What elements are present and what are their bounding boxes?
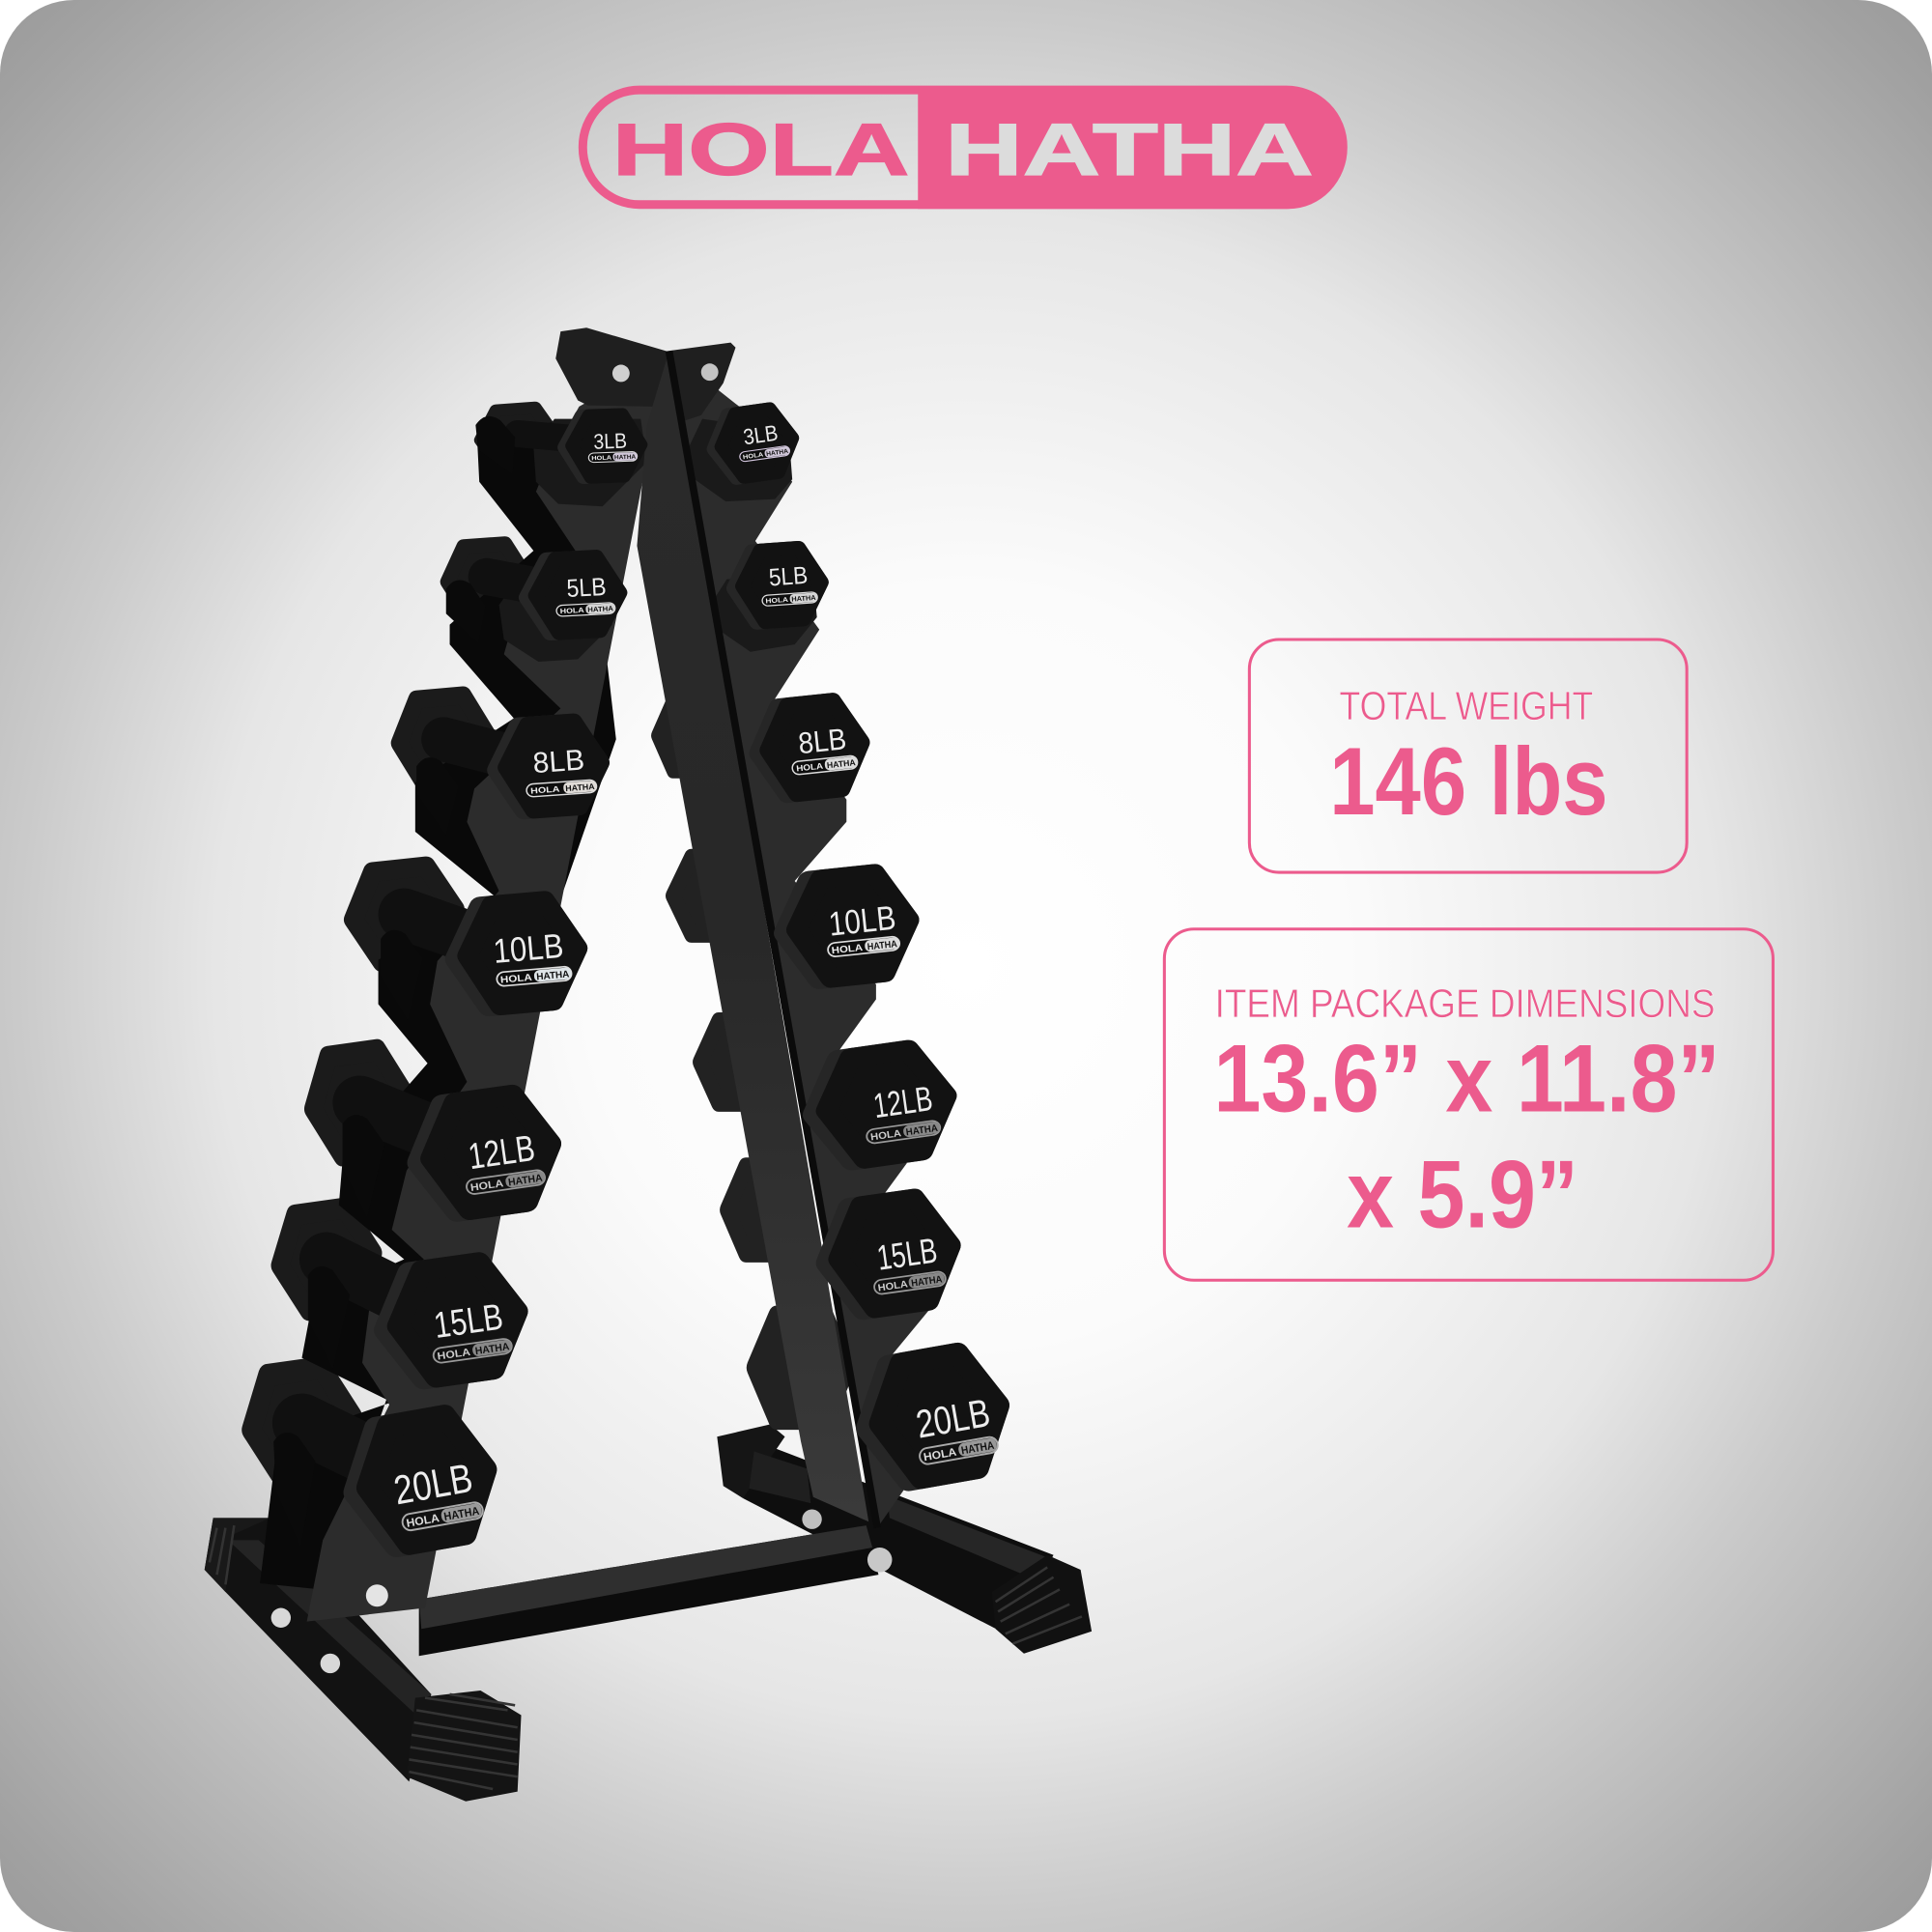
logo: HOLA xyxy=(612,109,909,191)
dumbbell 8LB left: HOLA xyxy=(530,784,560,796)
dumbbell 5LB right xyxy=(732,547,824,624)
center bar xyxy=(637,352,877,1528)
rack base: cross bar xyxy=(419,1525,878,1656)
dumbbell 12LB left: 12LB xyxy=(466,1127,537,1178)
left arm cradles xyxy=(499,419,647,662)
dumbbell 20LB right: HOLA xyxy=(923,1447,957,1463)
dumbbell 12LB left: HATHA xyxy=(507,1173,543,1188)
dumbbell 20LB right: 20LB xyxy=(913,1390,993,1447)
dumbbell 10LB left: 10LB xyxy=(492,926,565,971)
dumbbell 12LB right: HATHA xyxy=(905,1122,939,1138)
dumbbell 12LB left: HOLA xyxy=(469,1179,504,1194)
dumbbell 20LB right xyxy=(859,1349,1009,1486)
dumbbell 3LB left xyxy=(563,413,642,478)
dumbbell 20LB left xyxy=(346,1410,497,1551)
dumbbell 12LB right: HOLA xyxy=(869,1128,902,1143)
dumbbell 10LB left: HATHA xyxy=(536,970,570,982)
dumbbell 8LB left: HATHA xyxy=(565,781,596,793)
panel: item package dimensions: 13.6” x 11.8” xyxy=(1213,1026,1720,1133)
dumbbell 10LB right xyxy=(781,870,914,982)
dumbbell 20LB right: HATHA xyxy=(960,1440,995,1458)
dumbbell 3LB right: 3LB xyxy=(742,421,780,450)
dumbbell 12LB right xyxy=(808,1045,952,1165)
dumbbell 3LB left: 3LB xyxy=(593,428,627,454)
dumbbell 5LB left: 5LB xyxy=(566,572,607,603)
dumbbell 10LB left xyxy=(452,898,582,1009)
dumbbell 15LB right: 15LB xyxy=(874,1230,940,1277)
dumbbell 15LB left xyxy=(379,1259,525,1383)
dumbbell 15LB left: HATHA xyxy=(474,1342,510,1357)
dumbbell 15LB left: HOLA xyxy=(437,1347,471,1362)
panel: total weight: TOTAL WEIGHT xyxy=(1339,683,1593,728)
dumbbell 3LB right xyxy=(709,406,797,481)
dumbbell 8LB right xyxy=(754,698,866,797)
rack base: left foot xyxy=(205,1518,522,1802)
panel: total weight xyxy=(1249,639,1687,872)
dumbbell 10LB right: HOLA xyxy=(831,943,864,956)
dumbbell 8LB right: HATHA xyxy=(826,757,857,770)
dumbbell 8LB right: HOLA xyxy=(796,761,824,774)
left arm rear panel xyxy=(260,419,616,1589)
dumbbell 8LB left: 8LB xyxy=(532,743,585,780)
icon: base bolts xyxy=(271,1509,892,1673)
dumbbell 3LB left: HATHA xyxy=(614,454,637,461)
dumbbell 15LB right: HOLA xyxy=(877,1279,909,1294)
dumbbell 5LB right: 5LB xyxy=(768,560,809,591)
left arm rear dumbbell heads xyxy=(244,407,556,1482)
dumbbell 20LB left: HATHA xyxy=(443,1505,481,1523)
rack base hole xyxy=(366,1584,388,1606)
dumbbell 10LB right: 10LB xyxy=(827,898,897,943)
top bracket xyxy=(555,327,735,425)
dumbbell 12LB right: 12LB xyxy=(871,1079,935,1126)
dumbbell 5LB right: HOLA xyxy=(765,595,789,605)
dumbbell 20LB left: HOLA xyxy=(406,1512,440,1530)
dumbbell 15LB right: HATHA xyxy=(910,1274,944,1290)
dumbbell 5LB right: HATHA xyxy=(791,593,817,604)
panel: item package dimensions: x 5.9” xyxy=(1347,1141,1578,1248)
left arm face xyxy=(307,357,667,1622)
dumbbell 20LB left: 20LB xyxy=(390,1454,476,1513)
dumbbell 5LB left: HOLA xyxy=(559,606,584,615)
dumbbell 3LB right: HATHA xyxy=(766,448,789,458)
right arm cradles xyxy=(689,419,817,652)
left arm cradle hooks xyxy=(273,416,515,1548)
rack base: right foot xyxy=(717,1424,1092,1654)
panel: item package dimensions xyxy=(1164,929,1773,1280)
dumbbell 5LB left: HATHA xyxy=(587,605,614,614)
dumbbell 12LB left xyxy=(412,1091,557,1215)
logo: HATHA xyxy=(945,109,1314,191)
panel: total weight: 146 lbs xyxy=(1329,728,1608,836)
dumbbell 3LB left: HOLA xyxy=(591,455,612,462)
dumbbell 5LB left xyxy=(526,555,621,635)
left arm handles xyxy=(301,434,603,1481)
dumbbell 15LB left: 15LB xyxy=(432,1296,505,1347)
dumbbell 3LB right: HOLA xyxy=(743,452,764,461)
dumbbell 15LB right xyxy=(820,1195,957,1314)
logo xyxy=(582,86,1347,209)
right arm rear dumbbell heads xyxy=(657,700,846,1419)
dumbbell 10LB left: HOLA xyxy=(500,973,533,986)
dumbbell 8LB left xyxy=(494,720,604,812)
dumbbell 10LB right: HATHA xyxy=(867,939,898,952)
right arm face xyxy=(669,352,930,1528)
panel: item package dimensions: ITEM PACKAGE DIMENSIONS xyxy=(1215,980,1716,1026)
dumbbell 8LB right: 8LB xyxy=(797,723,848,760)
